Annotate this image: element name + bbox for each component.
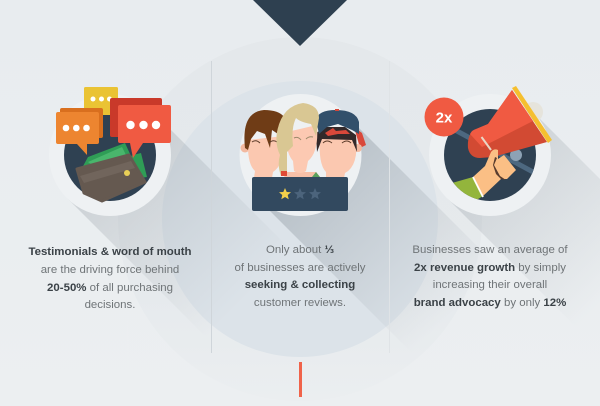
icon: hand xyxy=(473,149,516,197)
text block: brand advocacy: increasing their overall xyxy=(433,279,547,291)
icon: wallet with speech bubbles xyxy=(49,87,171,216)
icon: customer left xyxy=(240,110,284,178)
long shadow: middle icon xyxy=(257,112,523,378)
divider: left xyxy=(211,61,212,353)
text block: brand advocacy: brand advocacy by only 12% xyxy=(414,297,566,309)
text block: testimonials xyxy=(28,246,192,311)
icon: slider track xyxy=(455,130,535,173)
text block: reviews: seeking & collecting xyxy=(245,279,355,291)
text block: testimonials: are the driving force behind xyxy=(41,264,179,276)
red connector line xyxy=(299,362,302,397)
text block: brand advocacy: 2x revenue growth by simply xyxy=(414,262,566,274)
text block: reviews: of businesses are actively xyxy=(235,262,366,274)
icon: orange speech bubble xyxy=(56,108,103,155)
text block: testimonials: 20-50% of all purchasing xyxy=(47,282,173,294)
text block: testimonials: Testimonials & word of mouth xyxy=(28,246,192,258)
text block: brand advocacy xyxy=(412,244,568,309)
icon: three customers with star rating xyxy=(240,94,366,216)
icon: hand with megaphone xyxy=(424,86,552,216)
top pointer triangle xyxy=(253,0,347,46)
long shadow: right icon xyxy=(447,112,600,406)
text block: reviews xyxy=(235,244,366,309)
icon: banknotes xyxy=(82,143,147,178)
text block: reviews: customer reviews. xyxy=(254,297,346,309)
icon: dark red speech bubble xyxy=(110,98,162,137)
text block: brand advocacy: Businesses saw an average of xyxy=(412,244,568,256)
inner blue background circle xyxy=(162,81,438,357)
divider: right xyxy=(389,61,390,353)
icon: 2x badge: 2x xyxy=(436,110,453,126)
text block: testimonials: decisions. xyxy=(85,299,135,311)
icon: wallet body xyxy=(77,155,145,201)
icon: sleeve xyxy=(453,177,482,200)
icon: light circle behind horn xyxy=(523,102,543,122)
icon: wallet clasp xyxy=(124,170,130,176)
text block: reviews: Only about ⅓ xyxy=(266,244,334,256)
icon: red speech bubble xyxy=(118,105,171,158)
large faint background circle xyxy=(118,37,482,401)
icon: customer right xyxy=(316,109,366,178)
icon: yellow speech bubble xyxy=(84,87,118,115)
icon: rating card xyxy=(252,177,348,211)
icon: wallet flap shade xyxy=(80,161,135,183)
icon: megaphone xyxy=(468,86,552,158)
icon: customer middle xyxy=(276,103,320,177)
icon: slider knob xyxy=(510,149,522,161)
long shadow: left icon xyxy=(67,112,323,368)
